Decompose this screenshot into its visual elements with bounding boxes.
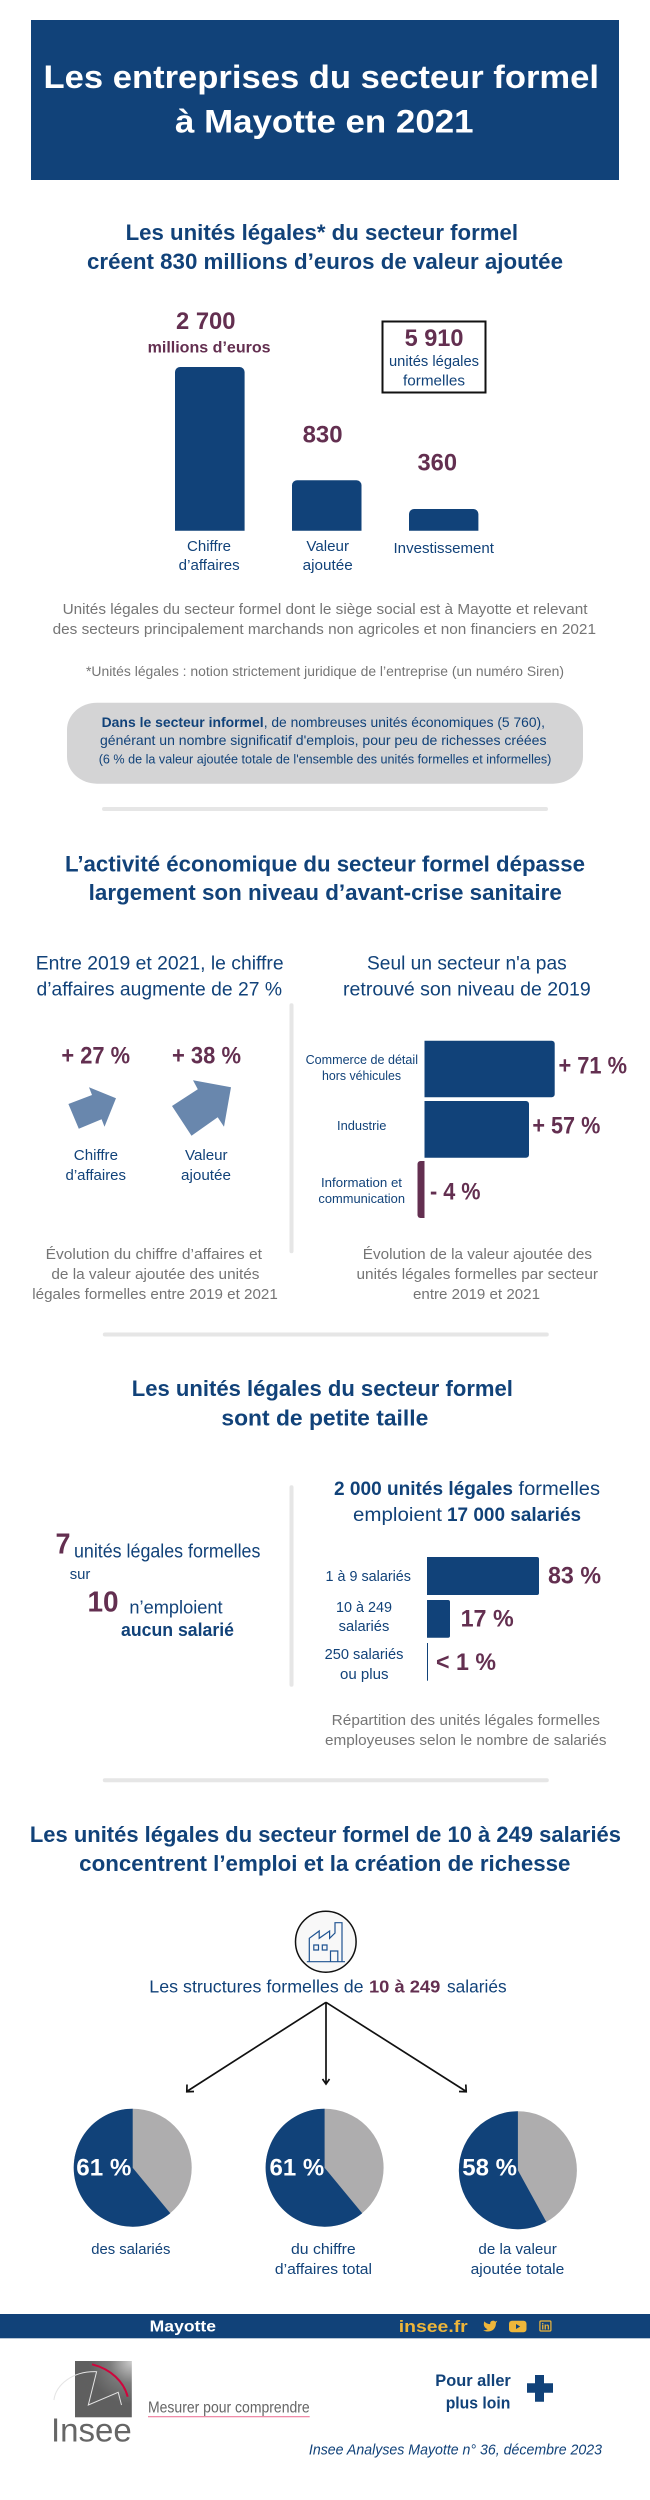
callout: secteur informel: Dans le secteur informel xyxy=(102,714,264,730)
pie chart: 61 % des salariés xyxy=(74,2109,192,2258)
title banner xyxy=(31,20,619,180)
caption: évolution chiffre d'affaires: légales formelles entre 2019 et 2021 xyxy=(32,1286,278,1303)
caption: évolution valeur ajoutée: unités légales formelles par secteur xyxy=(356,1266,598,1283)
bar: valeur ajoutée 830: Valeur xyxy=(306,538,349,555)
icon: up-right arrow large xyxy=(172,1080,231,1136)
text: structures formelles de 10 à 249 salariés: 10 à 249 xyxy=(369,1977,441,1997)
bar: valeur ajoutée 830: ajoutée xyxy=(303,557,353,574)
bar chart: chiffre d'affaires, valeur ajoutée, investissement xyxy=(148,308,495,574)
subheading: 2 000 unités légales: 17 000 salariés xyxy=(447,1504,581,1526)
text: footnote unités légales: *Unités légales : notion strictement juridique de l’entreprise (un numéro Siren) xyxy=(86,664,564,679)
text: scope note: Unités légales du secteur formel dont le siège social est à Mayotte et relevant xyxy=(63,601,588,618)
bar chart: répartition selon le nombre de salariés xyxy=(325,1557,601,1683)
caption: évolution valeur ajoutée: entre 2019 et 2021 xyxy=(413,1286,540,1303)
icon: linkedin xyxy=(540,2321,551,2332)
icon: plus xyxy=(527,2375,553,2402)
heading: section 3: Les unités légales du secteur formel xyxy=(132,1376,513,1401)
callout box: 5 910 unités légales formelles: unités légales xyxy=(389,353,479,370)
caption: évolution chiffre d'affaires: Évolution du chiffre d’affaires et xyxy=(46,1246,263,1263)
logo: Insee: Insee xyxy=(51,2411,132,2448)
arrow indicator: chiffre d'affaires +27 %: + 27 % xyxy=(61,1042,130,1069)
heading: section 1 xyxy=(87,220,563,274)
bar: valeur ajoutée 830 xyxy=(292,421,362,574)
pie chart: 61 % des salariés: 61 % xyxy=(76,2154,131,2181)
bar: investissement 360 xyxy=(394,450,495,557)
bar: 250 salariés ou plus moins de 1 %: ou plus xyxy=(340,1667,388,1683)
subheading: chiffre d'affaires +27 %: d’affaires augmente de 27 % xyxy=(36,978,282,1000)
bar: investissement 360: 360 xyxy=(418,450,457,477)
caption: répartition: employeuses selon le nombre de salariés xyxy=(325,1732,606,1749)
bar: information et communication -4 %: communication xyxy=(318,1192,405,1206)
logo: Insee: Mesurer pour comprendre xyxy=(148,2400,310,2417)
pie chart: 61 % du chiffre d'affaires total xyxy=(266,2109,384,2278)
footer band: Mayotte xyxy=(150,2319,216,2336)
bar chart: évolution de la valeur ajoutée par secteur xyxy=(306,1041,627,1218)
callout box: 5 910 unités légales formelles: 5 910 xyxy=(405,325,464,352)
callout: secteur informel: générant un nombre significatif d'emplois, pour peu de richesses créées xyxy=(100,732,546,748)
subheading: seul un secteur: retrouvé son niveau de 2019 xyxy=(343,978,591,1000)
subheading: 2 000 unités légales xyxy=(334,1478,600,1526)
pie chart: 58 % de la valeur ajoutée totale xyxy=(459,2111,577,2278)
callout box: 5 910 unités légales formelles: formelles xyxy=(403,373,465,390)
bar: information et communication -4 %: Information et xyxy=(321,1176,403,1190)
heading: section 4: concentrent l’emploi et la création de richesse xyxy=(79,1851,570,1876)
link: pour aller plus loin: Pour aller xyxy=(435,2371,511,2390)
icon: youtube xyxy=(509,2321,526,2332)
icon: up-right arrow small xyxy=(68,1087,116,1129)
bar: 10 à 249 salariés 17 %: salariés xyxy=(339,1619,389,1635)
bar: commerce de détail +71 %: hors véhicules xyxy=(322,1069,401,1083)
caption: répartition: Répartition des unités légales formelles xyxy=(332,1712,600,1729)
subheading: 2 000 unités légales: formelles xyxy=(518,1478,600,1500)
callout box: 5 910 unités légales formelles xyxy=(382,322,486,392)
logo: Insee xyxy=(51,2361,310,2448)
pie chart: 61 % du chiffre d'affaires total: du chiffre xyxy=(291,2241,356,2258)
callout: secteur informel: (6 % de la valeur ajoutée totale de l'ensemble des unités formelles et informelles) xyxy=(99,751,551,766)
bar: 1 à 9 salariés 83 %: 1 à 9 salariés xyxy=(326,1569,411,1585)
heading: section 2: L’activité économique du secteur formel dépasse xyxy=(65,851,585,876)
arrow indicator: valeur ajoutée +38 %: + 38 % xyxy=(172,1042,241,1069)
callout: secteur informel: , de nombreuses unités économiques (5 760), xyxy=(264,714,545,730)
pie chart: 61 % du chiffre d'affaires total: d’affaires total xyxy=(275,2261,372,2278)
bar: commerce de détail +71 % xyxy=(306,1041,627,1097)
caption: évolution valeur ajoutée: Évolution de la valeur ajoutée des xyxy=(363,1246,592,1263)
bar: chiffre d'affaires 2 700: millions d’euros xyxy=(148,340,271,357)
key figure: 7 sur 10: 10 xyxy=(88,1587,119,1619)
bar: 10 à 249 salariés 17 %: 10 à 249 xyxy=(336,1600,392,1616)
bar: chiffre d'affaires 2 700: Chiffre xyxy=(187,538,231,555)
icon: linkedin: in xyxy=(542,2322,550,2332)
bar: 250 salariés ou plus moins de 1 %: < 1 % xyxy=(436,1649,496,1676)
arrow indicator: valeur ajoutée +38 %: Valeur xyxy=(185,1147,228,1164)
key figure: 7 sur 10: sur xyxy=(70,1566,90,1583)
caption: évolution chiffre d'affaires: de la valeur ajoutée des unités xyxy=(51,1266,260,1283)
heading: section 4 xyxy=(30,1822,621,1876)
heading: section 2 xyxy=(65,851,585,905)
link: pour aller plus loin: plus loin xyxy=(446,2393,510,2412)
arrows: three branches to pies xyxy=(187,2002,466,2092)
arrow indicator: chiffre d'affaires +27 %: d’affaires xyxy=(66,1167,126,1184)
bar: chiffre d'affaires 2 700: 2 700 xyxy=(176,308,236,335)
bar: industrie +57 %: + 57 % xyxy=(532,1112,600,1139)
heading: section 3: sont de petite taille xyxy=(221,1405,428,1430)
text: structures formelles de 10 à 249 salariés: salariés xyxy=(447,1977,507,1997)
pie chart: 58 % de la valeur ajoutée totale: ajoutée totale xyxy=(471,2261,564,2278)
text: structures formelles de 10 à 249 salariés xyxy=(149,1977,507,1997)
footer band xyxy=(0,2314,650,2338)
key figure: 7 sur 10 xyxy=(56,1528,260,1640)
caption: répartition xyxy=(325,1712,606,1749)
bar: commerce de détail +71 %: Commerce de détail xyxy=(306,1053,418,1067)
bar: valeur ajoutée 830: 830 xyxy=(303,421,343,448)
callout: secteur informel xyxy=(67,703,583,784)
title banner: à Mayotte en 2021 xyxy=(175,104,474,140)
pie chart: 61 % du chiffre d'affaires total: 61 % xyxy=(270,2154,324,2181)
subheading: 2 000 unités légales: 2 000 unités légales xyxy=(334,1478,513,1500)
footer band: insee.fr xyxy=(399,2318,468,2336)
title banner: Les entreprises du secteur formel xyxy=(44,59,599,95)
bar: chiffre d'affaires 2 700 xyxy=(148,308,271,574)
bar: 250 salariés ou plus moins de 1 %: 250 salariés xyxy=(325,1647,403,1663)
subheading: chiffre d'affaires +27 %: Entre 2019 et 2021, le chiffre xyxy=(36,952,284,974)
bar: industrie +57 %: Industrie xyxy=(337,1119,386,1133)
caption: évolution chiffre d'affaires xyxy=(32,1246,278,1303)
heading: section 3 xyxy=(132,1376,513,1430)
bar: commerce de détail +71 %: + 71 % xyxy=(558,1052,627,1079)
text: structures formelles de 10 à 249 salariés: Les structures formelles de xyxy=(149,1977,364,1997)
bar: 1 à 9 salariés 83 %: 83 % xyxy=(548,1562,601,1589)
heading: section 1: Les unités légales* du secteur formel xyxy=(126,220,518,245)
bar: information et communication -4 % xyxy=(318,1161,480,1218)
heading: section 2: largement son niveau d’avant-crise sanitaire xyxy=(89,880,562,905)
key figure: 7 sur 10: aucun salarié xyxy=(121,1619,234,1640)
bar: 1 à 9 salariés 83 % xyxy=(326,1557,601,1595)
icon: twitter xyxy=(483,2321,497,2332)
bar: industrie +57 % xyxy=(337,1101,600,1158)
subheading: 2 000 unités légales: emploient xyxy=(353,1504,443,1526)
key figure: 7 sur 10: 7 xyxy=(56,1528,70,1560)
caption: évolution valeur ajoutée xyxy=(356,1246,598,1303)
pie chart: 58 % de la valeur ajoutée totale: de la valeur xyxy=(478,2241,557,2258)
heading: section 1: créent 830 millions d’euros de valeur ajoutée xyxy=(87,249,563,274)
subheading: seul un secteur xyxy=(343,952,591,1000)
bar: 250 salariés ou plus moins de 1 % xyxy=(325,1643,496,1683)
bar: information et communication -4 %: - 4 % xyxy=(430,1179,480,1206)
source line: Insee Analyses Mayotte n° 36, décembre 2023 xyxy=(309,2442,603,2459)
arrow indicator: chiffre d'affaires +27 %: Chiffre xyxy=(74,1147,118,1164)
arrow indicator: chiffre d'affaires +27 % xyxy=(61,1042,130,1184)
heading: section 4: Les unités légales du secteur formel de 10 à 249 salariés xyxy=(30,1822,621,1847)
bar: investissement 360: Investissement xyxy=(394,540,495,557)
subheading: seul un secteur: Seul un secteur n'a pas xyxy=(367,952,567,974)
bar: 10 à 249 salariés 17 % xyxy=(336,1600,514,1638)
text: scope note: des secteurs principalement marchands non agricoles et non financiers en 2021 xyxy=(53,621,596,638)
key figure: 7 sur 10: n’emploient xyxy=(129,1597,223,1618)
subheading: chiffre d'affaires +27 % xyxy=(36,952,284,1000)
text: scope note xyxy=(53,601,596,638)
bar: chiffre d'affaires 2 700: d’affaires xyxy=(179,557,240,574)
arrow indicator: valeur ajoutée +38 %: ajoutée xyxy=(181,1167,231,1184)
link: pour aller plus loin xyxy=(435,2371,553,2412)
icon: factory in circle xyxy=(296,1911,356,1972)
bar: 10 à 249 salariés 17 %: 17 % xyxy=(461,1606,514,1633)
arrow indicator: valeur ajoutée +38 % xyxy=(172,1042,241,1184)
key figure: 7 sur 10: unités légales formelles xyxy=(74,1541,260,1562)
pie chart: 61 % des salariés: des salariés xyxy=(91,2241,170,2258)
pie chart: 58 % de la valeur ajoutée totale: 58 % xyxy=(462,2154,517,2181)
